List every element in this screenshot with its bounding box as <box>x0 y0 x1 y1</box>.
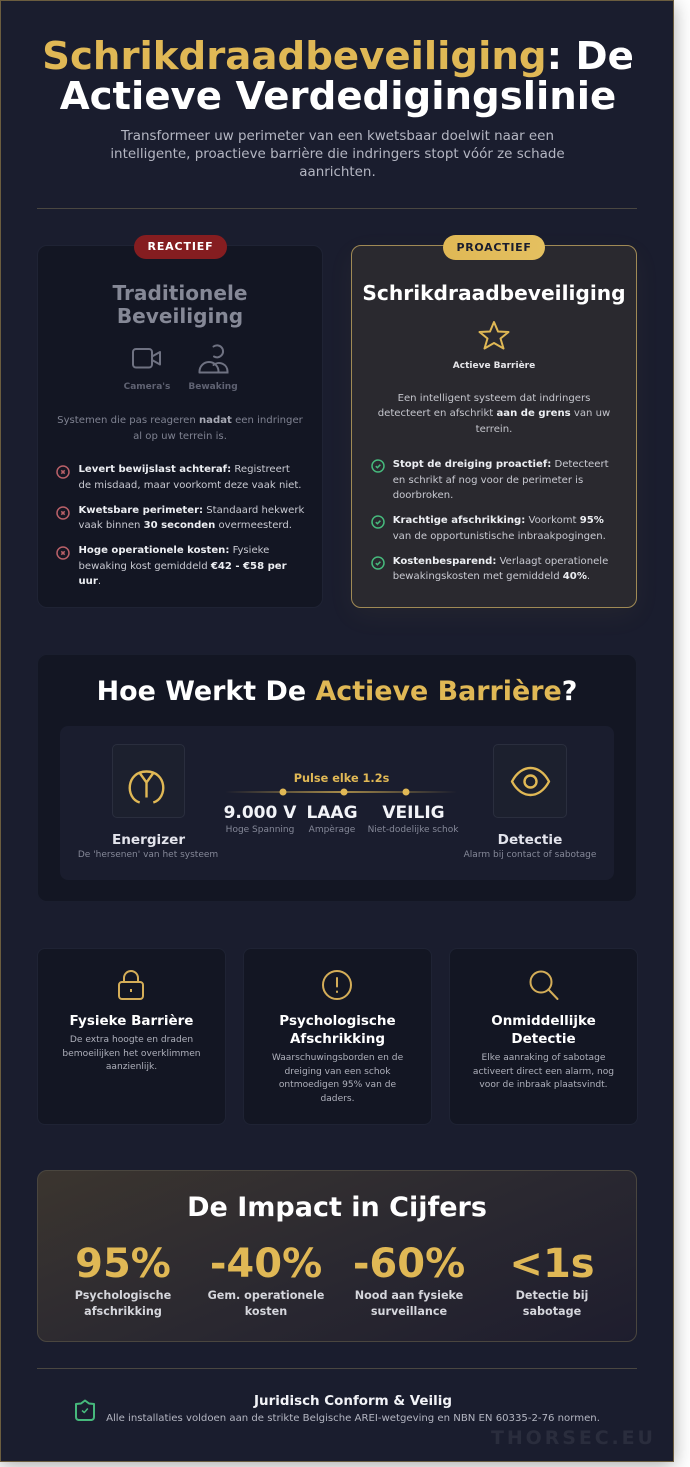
heading <box>279 1013 396 1047</box>
icon: vergrootglas <box>530 970 558 1000</box>
stat: -60% <box>353 1241 465 1318</box>
heading: traditionele beveiliging <box>112 281 248 328</box>
icon: energizer <box>112 744 185 818</box>
text: ontmoedigen 95% van de <box>279 1080 396 1090</box>
stat: 9.000 V: 9.000 V <box>224 803 296 823</box>
text: dreiging van een schok <box>285 1066 390 1076</box>
title <box>42 34 634 119</box>
text: intro proactief: Een intelligent systeem dat indringers <box>398 392 590 404</box>
icon: detectie <box>493 744 567 818</box>
label: detectie: Detectie <box>498 832 562 848</box>
icon: kruis 1 <box>56 465 70 479</box>
text: aanzienlijk. <box>106 1062 157 1072</box>
stat: -40%: kosten <box>245 1305 287 1318</box>
footer text: Alle installaties voldoen aan de strikte Belgische AREI-wetgeving en NBN EN 60335-2-76 normen. <box>106 1413 600 1424</box>
stat: <1s: Detectie bij <box>516 1289 588 1302</box>
text: intro reactief: Systemen die pas reageren nadat een indringer <box>57 415 303 426</box>
stat: <1s: sabotage <box>523 1305 581 1318</box>
stat: -40%: Gem. operationele <box>208 1289 324 1302</box>
stat: 95%: Psychologische <box>75 1289 171 1302</box>
pulse line <box>232 788 450 796</box>
text: intro reactief <box>57 415 303 442</box>
label: bewaking: Bewaking <box>188 382 238 392</box>
heading: Psychologische <box>279 1013 396 1029</box>
icon: guard <box>198 344 228 374</box>
item 1: doorbroken. <box>393 490 453 501</box>
panel: traditionele beveiliging <box>37 245 323 608</box>
icon: uitroepteken <box>322 970 352 1000</box>
footer heading: Juridisch Conform & Veilig <box>254 1394 452 1409</box>
text <box>62 1035 201 1072</box>
text: intro proactief: terrein. <box>476 424 512 435</box>
stat: laag: LAAG <box>306 803 358 823</box>
text: De extra hoogte en draden <box>70 1035 193 1045</box>
item 1: Stopt de dreiging proactief: Detecteert <box>393 459 609 470</box>
panel: psychologische afschrikking <box>243 948 432 1125</box>
text: activeert direct een alarm, nog <box>473 1066 614 1076</box>
text: bemoeilijken het overklimmen <box>62 1048 201 1058</box>
text <box>272 1053 403 1104</box>
label: pulse: Pulse elke 1.2s <box>294 772 389 785</box>
icon: star <box>478 321 510 350</box>
icon: kruis 3 <box>56 546 70 560</box>
stat: 95%: 95% <box>75 1241 171 1287</box>
heading: schrikdraadbeveiliging: Schrikdraadbeveiliging <box>362 281 626 305</box>
caption: energizer: De 'hersenen' van het systeem <box>78 850 218 860</box>
badge: proactief: PROACTIEF <box>456 241 532 254</box>
heading: impact: De Impact in Cijfers <box>187 1192 487 1223</box>
item 1: en schrikt af nog voor de perimeter is <box>393 475 583 486</box>
item 3: bewakingskosten met gemiddeld 40%. <box>393 571 590 582</box>
text: intro reactief: al op uw terrein is. <box>133 431 227 442</box>
item 3: Kostenbesparend: Verlaagt operationele <box>393 556 608 566</box>
panel: hoe werkt <box>37 654 637 902</box>
list: reactieve nadelen <box>56 464 304 587</box>
text: Elke aanraking of sabotage <box>482 1053 605 1063</box>
heading: Detectie <box>511 1031 576 1047</box>
item 3 <box>393 556 608 582</box>
text: Waarschuwingsborden en de <box>272 1053 403 1063</box>
item 3: uur. <box>78 576 101 587</box>
stat: <1s: <1s <box>509 1241 595 1287</box>
badge: reactief <box>134 235 227 259</box>
item 2: Krachtige afschrikking: Voorkomt 95% <box>393 515 604 526</box>
list: proactieve voordelen <box>371 459 609 582</box>
icon: vinkje 3 <box>371 556 385 570</box>
text <box>473 1053 614 1090</box>
subtitle: Transformeer uw perimeter van een kwetsbaar doelwit naar een <box>121 129 554 144</box>
title: Schrikdraadbeveiliging: De <box>42 34 634 79</box>
text: daders. <box>320 1094 355 1104</box>
panel: schrikdraadbeveiliging <box>351 245 637 608</box>
panel: onmiddellijke detectie <box>449 948 638 1125</box>
caption: ampèrage: Ampèrage <box>309 825 355 835</box>
stat: veilig: VEILIG <box>382 803 445 823</box>
item 3 <box>78 545 287 587</box>
diagram panel <box>60 726 614 880</box>
subtitle: aanrichten. <box>299 165 376 180</box>
icon: vinkje 1 <box>371 459 385 473</box>
caption: hoge spanning: Hoge Spanning <box>226 825 294 835</box>
heading: Fysieke Barrière <box>70 1013 193 1029</box>
stat: -40%: -40% <box>210 1241 322 1287</box>
item 1 <box>393 459 609 501</box>
stat: -60%: Nood aan fysieke <box>355 1289 463 1302</box>
heading: Afschrikking <box>290 1031 385 1047</box>
item 2 <box>393 515 606 542</box>
heading: Onmiddellijke <box>491 1013 596 1029</box>
text: voor de inbraak plaatsvindt. <box>479 1080 608 1090</box>
icon: slot <box>118 970 144 1000</box>
heading <box>491 1013 596 1047</box>
caption: detectie: Alarm bij contact of sabotage <box>464 850 596 860</box>
item 1: Levert bewijslast achteraf: Registreert <box>78 464 290 475</box>
icon: kruis 2 <box>56 506 70 520</box>
caption: niet-dodelijke schok: Niet-dodelijke schok <box>368 825 458 835</box>
stat: 95%: afschrikking <box>84 1305 162 1318</box>
item 1: de misdaad, maar voorkomt deze vaak niet. <box>78 480 301 491</box>
subtitle <box>110 129 565 180</box>
item 2: van de opportunistische inbraakpogingen. <box>393 531 606 542</box>
heading: traditionele beveiliging: Beveiliging <box>117 304 243 328</box>
badge: reactief: REACTIEF <box>148 240 214 253</box>
item 1 <box>78 464 301 491</box>
heading: hoe werkt: Hoe Werkt De Actieve Barrière? <box>97 676 577 707</box>
watermark: THORSEC.EU <box>491 1427 656 1449</box>
text: intro proactief: detecteert en afschrikt aan de grens van uw <box>378 408 610 419</box>
icon: schild <box>75 1400 95 1421</box>
stat: <1s <box>509 1241 595 1318</box>
item 2: vaak binnen 30 seconden overmeesterd. <box>78 520 292 531</box>
item 2: Kwetsbare perimeter: Standaard hekwerk <box>78 504 304 516</box>
title: Actieve Verdedigingslinie <box>60 74 616 119</box>
heading: traditionele beveiliging: Traditionele <box>112 281 248 305</box>
label: actieve barrière: Actieve Barrière <box>453 361 535 371</box>
stat: 95% <box>75 1241 171 1318</box>
label: camera's: Camera's <box>124 382 170 392</box>
subtitle: intelligente, proactieve barrière die indringers stopt vóór ze schade <box>110 147 565 162</box>
text: intro proactief <box>378 392 610 435</box>
item 2 <box>78 504 304 531</box>
panel: fysieke barrière <box>37 948 226 1125</box>
icon: camera <box>132 348 161 368</box>
item 3: bewaking kost gemiddeld €42 - €58 per <box>78 561 287 572</box>
label: energizer: Energizer <box>112 832 185 848</box>
stat: -40% <box>208 1241 324 1318</box>
badge: proactief <box>443 235 545 260</box>
stat: -60%: surveillance <box>371 1305 447 1318</box>
item 3: Hoge operationele kosten: Fysieke <box>78 545 269 556</box>
stat: -60%: -60% <box>353 1241 465 1287</box>
panel: impact in cijfers <box>37 1170 637 1342</box>
icon: vinkje 2 <box>371 515 385 529</box>
